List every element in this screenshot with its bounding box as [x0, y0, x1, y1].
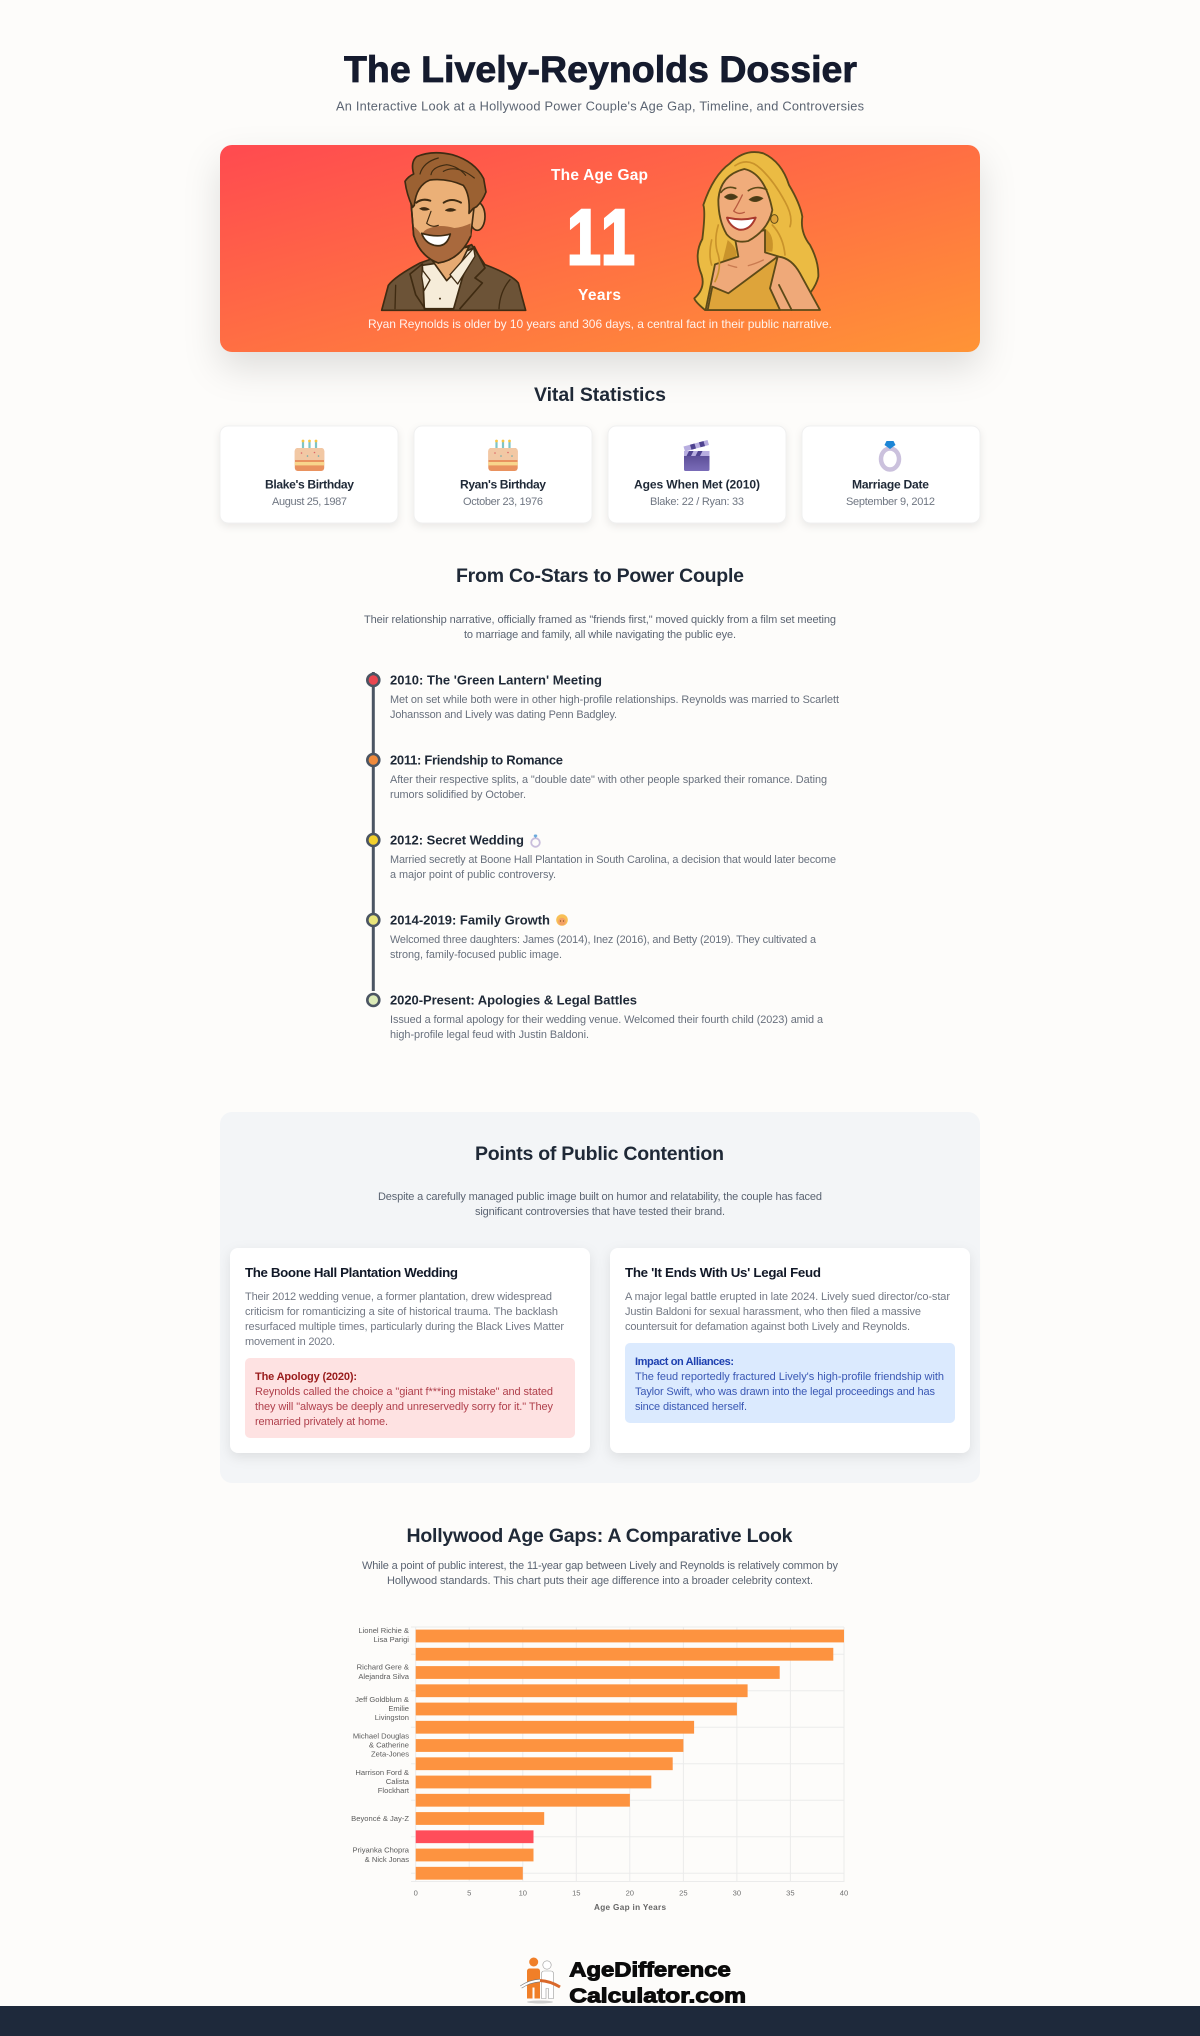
card: It Ends With Us feud: countersuit for defamation against both Lively and Reynolds. — [625, 1321, 910, 1333]
x axis labels: 20 — [626, 1889, 634, 1898]
y axis labels: Alejandra Silva — [358, 1672, 410, 1681]
x axis labels: 0 — [414, 1889, 418, 1898]
card: ages when met — [608, 426, 786, 523]
panel: points of public contention — [220, 1112, 980, 1483]
illustration: Ryan Reynolds cartoon — [382, 153, 526, 310]
y axis labels: Michael Douglas — [353, 1732, 409, 1740]
x axis labels: 15 — [572, 1889, 581, 1898]
y axis labels: Flockhart — [378, 1786, 410, 1795]
card: Blake's birthday: August 25, 1987 — [272, 496, 347, 508]
x axis labels: 10 — [519, 1889, 527, 1898]
logo: Calculator.com — [569, 1984, 746, 2008]
icon: baby — [556, 914, 568, 926]
x axis labels: 5 — [467, 1889, 471, 1898]
logo — [521, 1958, 746, 2008]
card: Ryan's birthday: Ryan's Birthday — [460, 478, 546, 492]
card: It Ends With Us feud: The 'It Ends With Us' Legal Feud — [625, 1265, 821, 1280]
event: 2020-present: 2020-Present: Apologies & Legal Battles — [390, 992, 637, 1008]
section: vital statistics — [220, 384, 980, 523]
y axis labels: Livingston — [375, 1713, 409, 1722]
callout: the apology: The Apology (2020): — [255, 1371, 357, 1383]
intro text: significant controversies that have tested their brand. — [475, 1206, 725, 1218]
y axis labels: & Catherine — [369, 1740, 409, 1750]
card: It Ends With Us feud: A major legal battle erupted in late 2024. Lively sued director/co-star — [625, 1291, 950, 1303]
x axis labels: 30 — [733, 1889, 741, 1898]
y axis labels: Richard Gere & — [357, 1662, 409, 1672]
event: 2011: rumors solidified by October. — [390, 789, 526, 801]
intro text — [378, 1191, 822, 1218]
label: the age gap: The Age Gap — [551, 167, 648, 184]
y axis labels: Emilie — [388, 1704, 409, 1713]
big number 11: 11 — [567, 194, 635, 281]
card: Boone Hall wedding: The Boone Hall Plantation Wedding — [245, 1265, 458, 1280]
card: Boone Hall wedding: Their 2012 wedding venue, a former plantation, drew widespread — [245, 1291, 552, 1303]
card: marriage date: September 9, 2012 — [846, 496, 935, 508]
callout: impact on alliances: The feud reportedly fractured Lively's high-profile friendship with — [635, 1371, 944, 1383]
event: 2012: Married secretly at Boone Hall Plantation in South Carolina, a decision that would later become — [390, 854, 836, 866]
icon: ring — [881, 441, 899, 470]
event: 2011: After their respective splits, a "double date" with other people sparked their romance. Dating — [390, 774, 827, 786]
x axis labels: 40 — [840, 1889, 848, 1898]
event: 2020-present — [367, 992, 824, 1041]
y axis labels: Calista — [386, 1777, 410, 1786]
callout: impact on alliances — [625, 1343, 955, 1423]
wordmark: AgeDifference — [569, 1958, 731, 1982]
card: Boone Hall wedding: criticism for romanticizing a site of historical trauma. The backlash — [245, 1306, 558, 1318]
event: 2012 — [367, 832, 836, 881]
intro text: While a point of public interest, the 11-year gap between Lively and Reynolds is relatively common by — [362, 1560, 838, 1572]
intro text — [362, 1560, 838, 1587]
y axis labels: Priyanka Chopra — [352, 1846, 410, 1854]
card: ages when met: Blake: 22 / Ryan: 33 — [650, 496, 744, 508]
card: Blake's birthday: Blake's Birthday — [265, 478, 354, 492]
event: 2011: 2011: Friendship to Romance — [390, 752, 563, 768]
card: ages when met: Ages When Met (2010) — [634, 478, 760, 492]
timeline line — [372, 672, 375, 991]
event: 2010: 2010: The 'Green Lantern' Meeting — [390, 672, 602, 688]
callout: impact on alliances: since distanced herself. — [635, 1401, 747, 1413]
event: 2014-2019: Welcomed three daughters: James (2014), Inez (2016), and Betty (2019). They cultivated a — [390, 934, 817, 946]
y axis labels: Beyoncé & Jay-Z — [351, 1814, 409, 1823]
card: Ryan's birthday — [414, 426, 592, 523]
card: It Ends With Us feud: Justin Baldoni for sexual harassment, who then filed a massive — [625, 1306, 921, 1318]
card: Blake's birthday — [220, 426, 398, 523]
event: 2012: 2012: Secret Wedding — [390, 832, 524, 848]
intro text — [364, 614, 836, 641]
card: It Ends With Us feud — [610, 1248, 970, 1453]
event: 2010: Johansson and Lively was dating Penn Badgley. — [390, 709, 617, 721]
event: 2010 — [367, 672, 839, 721]
card: Boone Hall wedding: movement in 2020. — [245, 1336, 335, 1348]
hero caption: Ryan Reynolds is older by 10 years and 306 days, a central fact in their public narrative. — [368, 317, 832, 331]
header — [336, 49, 864, 114]
event: 2011 — [367, 752, 827, 801]
icon: small ring — [531, 834, 540, 847]
x axis labels: 25 — [679, 1889, 688, 1898]
callout: impact on alliances: Taylor Swift, who was drawn into the legal proceedings and has — [635, 1386, 936, 1398]
x axis labels — [414, 1889, 848, 1898]
callout: impact on alliances: Impact on Alliances: — [635, 1356, 734, 1368]
x axis labels: 35 — [786, 1889, 795, 1898]
callout: the apology: remarried privately at home. — [255, 1416, 388, 1428]
section: timeline — [364, 565, 839, 1041]
event: 2014-2019 — [367, 912, 817, 961]
y axis labels — [351, 1626, 410, 1864]
y axis labels: Lisa Parigi — [374, 1635, 409, 1644]
y axis labels: Lionel Richie & — [358, 1626, 409, 1635]
label: years: Years — [578, 287, 621, 304]
intro text: Their relationship narrative, officially framed as "friends first," moved quickly from a film set meeting — [364, 614, 836, 626]
heading: From Co-Stars to Power Couple — [456, 565, 744, 587]
card: marriage date: Marriage Date — [852, 478, 929, 492]
footer bar — [0, 2006, 1200, 2036]
icon: two people with ribbon — [521, 1958, 560, 2004]
panel: age gap hero — [220, 145, 980, 352]
event: 2020-present: high-profile legal feud with Justin Baldoni. — [390, 1029, 589, 1041]
event: 2014-2019: 2014-2019: Family Growth — [390, 912, 550, 928]
card: Boone Hall wedding: resurfaced multiple times, particularly during the Black Lives Matter — [245, 1321, 564, 1333]
intro text: to marriage and family, all while navigating the public eye. — [464, 629, 736, 641]
heading: Vital Statistics — [534, 384, 666, 406]
title: The Lively-Reynolds Dossier — [344, 49, 857, 90]
event: 2020-present: Issued a formal apology for their wedding venue. Welcomed their fourth child (2023) amid a — [390, 1014, 824, 1026]
y axis labels: Zeta-Jones — [371, 1750, 409, 1758]
bar chart — [351, 1626, 848, 1912]
card: Boone Hall wedding — [230, 1248, 590, 1453]
section: age gap comparison — [351, 1525, 848, 1912]
event: 2014-2019: strong, family-focused public image. — [390, 949, 562, 961]
heading: Hollywood Age Gaps: A Comparative Look — [406, 1525, 793, 1547]
event: 2012: a major point of public controversy. — [390, 869, 556, 881]
subtitle: An Interactive Look at a Hollywood Power Couple's Age Gap, Timeline, and Controversies — [336, 98, 864, 114]
heading: Points of Public Contention — [475, 1143, 724, 1165]
illustration: Blake Lively cartoon — [694, 152, 820, 310]
callout: the apology — [245, 1358, 575, 1438]
card: marriage date — [802, 426, 980, 523]
y axis labels: & Nick Jonas — [365, 1855, 409, 1864]
icon: clapperboard — [684, 440, 710, 471]
callout: the apology: Reynolds called the choice a "giant f***ing mistake" and stated — [255, 1386, 553, 1398]
intro text: Hollywood standards. This chart puts their age difference into a broader celebrity context. — [387, 1575, 813, 1587]
x axis title: Age Gap in Years — [594, 1903, 666, 1912]
event: 2010: Met on set while both were in other high-profile relationships. Reynolds was married to Scarlett — [390, 694, 839, 706]
callout: the apology: they will "always be deeply and unreservedly sorry for it." They — [255, 1401, 554, 1413]
card: Ryan's birthday: October 23, 1976 — [463, 496, 543, 508]
intro text: Despite a carefully managed public image built on humor and relatability, the couple has faced — [378, 1191, 822, 1203]
y axis labels: Harrison Ford & — [355, 1768, 409, 1777]
y axis labels: Jeff Goldblum & — [355, 1695, 409, 1704]
